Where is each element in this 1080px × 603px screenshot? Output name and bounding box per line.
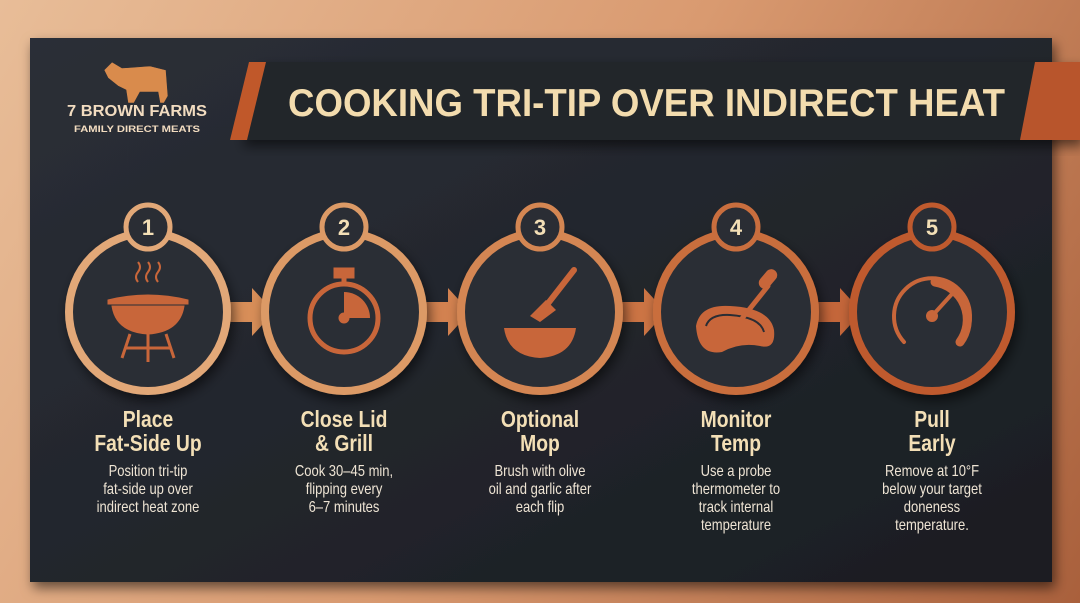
icon: steak with thermometer	[696, 267, 780, 352]
step 5: temperature.	[895, 517, 969, 534]
step 5: Remove at 10°F	[885, 463, 979, 480]
step 3: Optional	[501, 408, 579, 432]
step 3: 3	[534, 215, 546, 240]
step 3: each flip	[516, 499, 564, 516]
title banner: COOKING TRI-TIP OVER INDIRECT HEAT	[288, 82, 1005, 125]
step 3	[461, 205, 619, 516]
step 3: oil and garlic after	[489, 481, 592, 498]
step 5: below your target	[882, 481, 982, 498]
icon: gauge	[894, 278, 970, 342]
step 5: Early	[908, 432, 956, 456]
step 1	[69, 205, 227, 516]
step 2: 2	[338, 215, 350, 240]
step 4: temperature	[701, 517, 771, 534]
step 2: Close Lid	[301, 408, 387, 432]
step 2	[265, 205, 423, 516]
step 5: 5	[926, 215, 938, 240]
step 4: Temp	[711, 432, 761, 456]
icon: cow	[104, 62, 168, 103]
step 3: Mop	[520, 432, 560, 456]
logo	[67, 62, 207, 135]
step 2: Cook 30–45 min,	[295, 463, 393, 480]
step 5	[853, 205, 1011, 534]
icon: stopwatch	[310, 270, 378, 352]
step 2: & Grill	[315, 432, 373, 456]
step 1: indirect heat zone	[97, 499, 199, 516]
step 2: 6–7 minutes	[309, 499, 379, 516]
step 1: 1	[142, 215, 154, 240]
title banner	[230, 62, 1080, 140]
arrows	[226, 288, 862, 336]
icon: brush and bowl	[504, 270, 576, 358]
step 4: Use a probe	[701, 463, 771, 480]
step 4: thermometer to	[692, 481, 780, 498]
step 4: track internal	[699, 499, 773, 516]
step 5: Pull	[914, 408, 950, 432]
step 5: doneness	[904, 499, 960, 516]
step 3: Brush with olive	[494, 463, 586, 480]
step 1: Place	[123, 408, 173, 432]
step 4: 4	[730, 215, 743, 240]
step 1: Fat-Side Up	[94, 432, 202, 456]
step 1: fat-side up over	[103, 481, 193, 498]
step 4: Monitor	[701, 408, 771, 432]
step 2: flipping every	[306, 481, 383, 498]
step 4	[657, 205, 815, 534]
logo: FAMILY DIRECT MEATS	[74, 124, 200, 135]
step 1: Position tri-tip	[109, 463, 187, 480]
logo: 7 BROWN FARMS	[67, 103, 207, 120]
icon: grill	[108, 262, 188, 362]
